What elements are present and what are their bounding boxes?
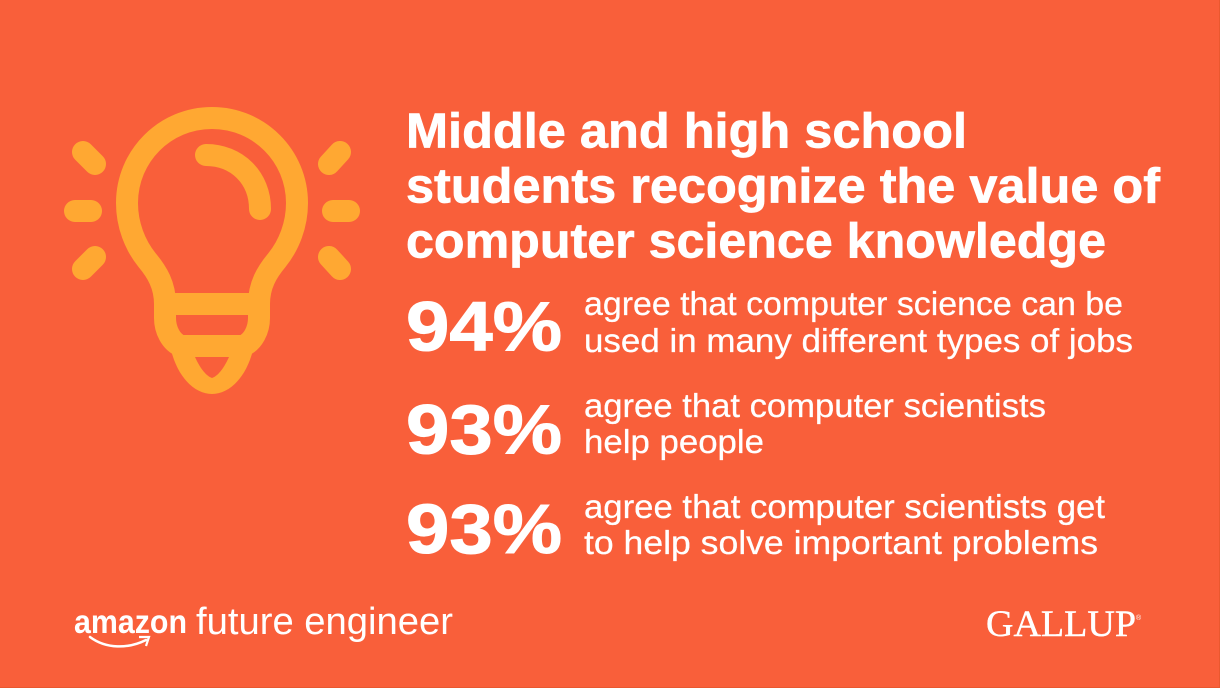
stat: 93% solve problems [406,488,1105,568]
title: students recognize the value of [406,160,1161,214]
logo: amazon future engineer: amazon [74,603,187,640]
stat: 93% help people: help people [584,423,764,460]
logo: Gallup: GALLUP [986,604,1136,645]
logo: amazon future engineer: future engineer [196,601,453,643]
icon: light bulb [75,118,349,394]
title: Middle and high school [406,104,967,158]
stat: 94%: used in many different types of jobs [584,322,1133,359]
title [406,104,1161,268]
stat: 93% solve problems: 93% [406,490,562,568]
stat: 94% [406,285,1133,366]
logo: amazon future engineer [74,601,453,646]
stat: 93% help people: agree that computer scientists [584,387,1046,424]
stat: 93% solve problems: agree that computer scientists get [584,488,1105,525]
title: computer science knowledge [406,214,1106,268]
stat: 94%: agree that computer science can be [584,285,1123,322]
stat: 94%: 94% [406,288,562,366]
stat: 93% help people [406,387,1046,468]
stat: 93% solve problems: to help solve important problems [584,524,1098,561]
stat: 93% help people: 93% [406,390,562,468]
logo: Gallup: ® [1136,614,1142,622]
